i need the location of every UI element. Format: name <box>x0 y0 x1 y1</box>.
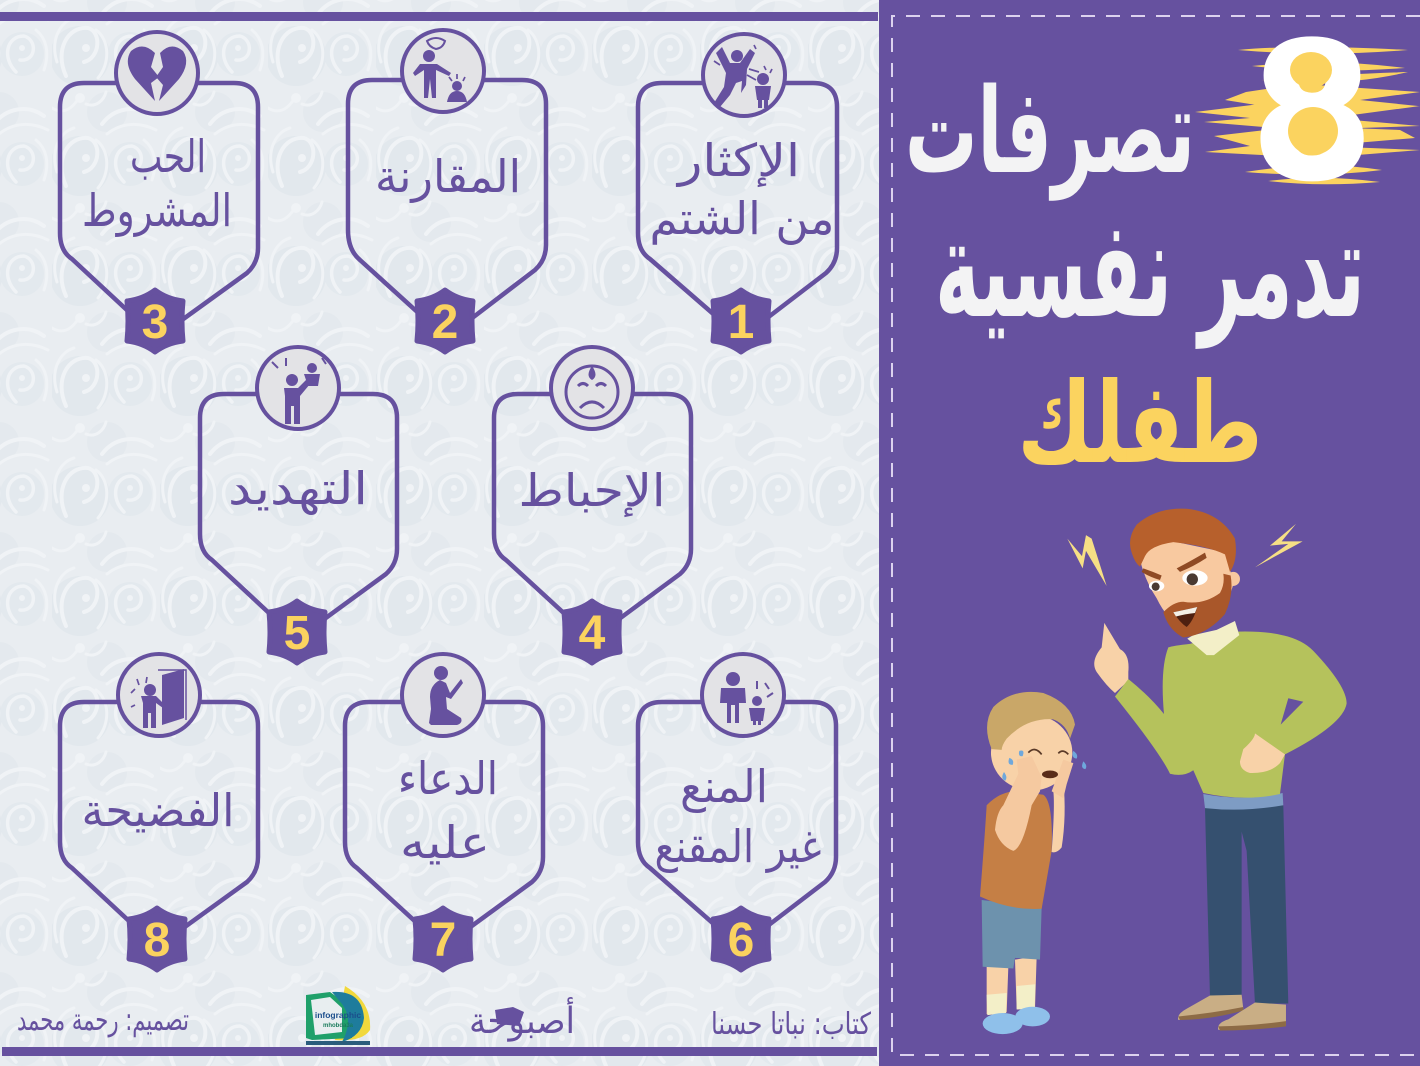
icon circle <box>703 34 785 116</box>
footer: brand logo: أصبوحة <box>469 997 575 1042</box>
number badge <box>417 290 473 352</box>
dashed border <box>892 16 1420 1055</box>
text: الفضيحة <box>82 784 234 837</box>
number badge: 2 <box>432 296 458 349</box>
frame <box>200 394 397 639</box>
number badge <box>129 908 185 970</box>
number badge <box>713 908 769 970</box>
text: line 1: الحب <box>130 130 206 183</box>
title number with brush <box>1195 0 1420 218</box>
number badge: 8 <box>144 914 170 967</box>
number badge: 6 <box>728 914 754 967</box>
illustration: angry father and crying boy <box>980 509 1347 1034</box>
number badge: 3 <box>142 296 168 349</box>
icon circle <box>116 32 198 114</box>
footer: infographic team logo: mhobda3a <box>323 1023 354 1029</box>
boy <box>980 692 1086 1034</box>
footer: infographic team logo <box>306 986 370 1045</box>
icon circle <box>402 30 484 112</box>
icon circle <box>551 347 633 429</box>
text: line 1: المنع <box>680 760 768 813</box>
card 6: unconvincing refusal <box>638 654 836 970</box>
patterned background <box>0 0 880 1066</box>
icon circle <box>257 347 339 429</box>
father <box>1094 509 1347 1031</box>
number badge: 5 <box>284 607 310 660</box>
title line 1: تصرفات <box>905 62 1195 201</box>
frame <box>60 83 258 338</box>
bottom bar <box>2 1047 877 1056</box>
title line 3: طفلك <box>1018 359 1262 489</box>
footer: author credit: كتاب: نباتا حسنا <box>711 1007 872 1042</box>
card 7: cursing <box>345 654 543 970</box>
text: المقارنة <box>375 150 521 203</box>
footer: designer credit: تصميم: رحمة محمد <box>17 1003 189 1038</box>
number badge <box>269 601 325 663</box>
icon circle <box>402 654 484 736</box>
text: line 2: غير المقنع <box>654 820 822 873</box>
icon circle <box>702 654 784 736</box>
brush strokes <box>1195 47 1420 184</box>
frame <box>60 702 258 947</box>
text: line 2: عليه <box>400 816 490 869</box>
number badge: 1 <box>728 296 754 349</box>
number badge <box>564 601 620 663</box>
text: التهديد <box>228 462 368 515</box>
number badge: 4 <box>579 607 606 660</box>
text: line 1: الدعاء <box>398 752 498 805</box>
card 3: conditional love <box>60 32 258 352</box>
frame <box>494 394 691 639</box>
lightning left <box>1067 535 1107 586</box>
card 4: frustration <box>494 347 691 663</box>
text: الإحباط <box>518 464 666 517</box>
number badge <box>713 290 769 352</box>
number badge: 7 <box>430 914 456 967</box>
footer: infographic team logo: infographic <box>315 1010 361 1020</box>
text: line 2: المشروط <box>82 184 232 238</box>
number badge <box>127 290 183 352</box>
frame <box>345 702 543 947</box>
icon circle <box>118 654 200 736</box>
card 5: threats <box>200 347 397 663</box>
top bar <box>0 12 878 21</box>
card 1: insults <box>638 34 837 352</box>
frame <box>348 80 546 338</box>
text: line 1: الإكثار <box>676 134 800 187</box>
card 8: public shaming <box>60 654 258 970</box>
numeral 8: 8 <box>1258 0 1366 218</box>
card 2: comparison <box>348 30 546 352</box>
frame <box>638 83 837 338</box>
number holes <box>1290 52 1332 88</box>
text: line 2: من الشتم <box>650 192 834 245</box>
number badge <box>415 908 471 970</box>
frame <box>638 702 836 947</box>
panel: title and illustration <box>879 0 1420 1066</box>
lightning right <box>1255 524 1303 567</box>
